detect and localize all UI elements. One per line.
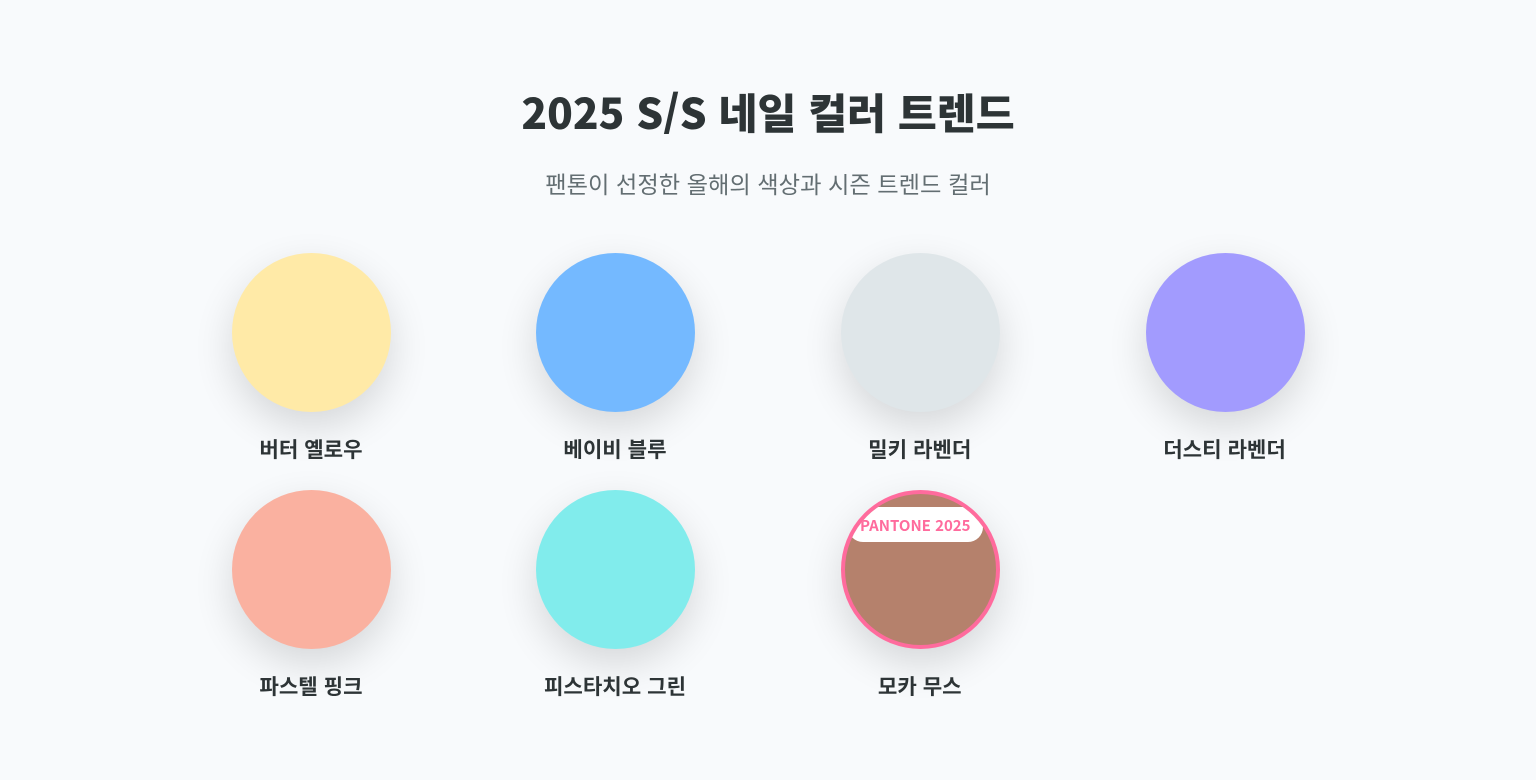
swatch: pastel pink: 파스텔 핑크 <box>259 670 363 701</box>
swatch: butter yellow: 버터 옐로우 <box>259 433 363 464</box>
swatch: milky lavender <box>830 253 1012 464</box>
swatch: baby blue: 베이비 블루 <box>563 433 667 464</box>
swatch: butter yellow <box>220 253 402 464</box>
swatch: dusty lavender <box>1134 253 1316 464</box>
swatch: mocha mousse <box>830 490 1012 701</box>
swatch: milky lavender: 밀키 라벤더 <box>868 433 971 464</box>
swatch: pistachio green <box>524 490 706 701</box>
title: 2025 S/S 네일 컬러 트렌드 <box>521 80 1015 142</box>
badge: pantone 2025 <box>848 507 983 542</box>
swatch: pastel pink <box>220 490 402 701</box>
swatch: mocha mousse: 모카 무스 <box>878 670 962 701</box>
swatch: baby blue <box>524 253 706 464</box>
swatch: pistachio green: 피스타치오 그린 <box>544 670 686 701</box>
subtitle: 팬톤이 선정한 올해의 색상과 시즌 트렌드 컬러 <box>545 166 991 200</box>
badge: pantone 2025: PANTONE 2025 <box>860 515 971 536</box>
swatch: dusty lavender: 더스티 라벤더 <box>1163 433 1286 464</box>
